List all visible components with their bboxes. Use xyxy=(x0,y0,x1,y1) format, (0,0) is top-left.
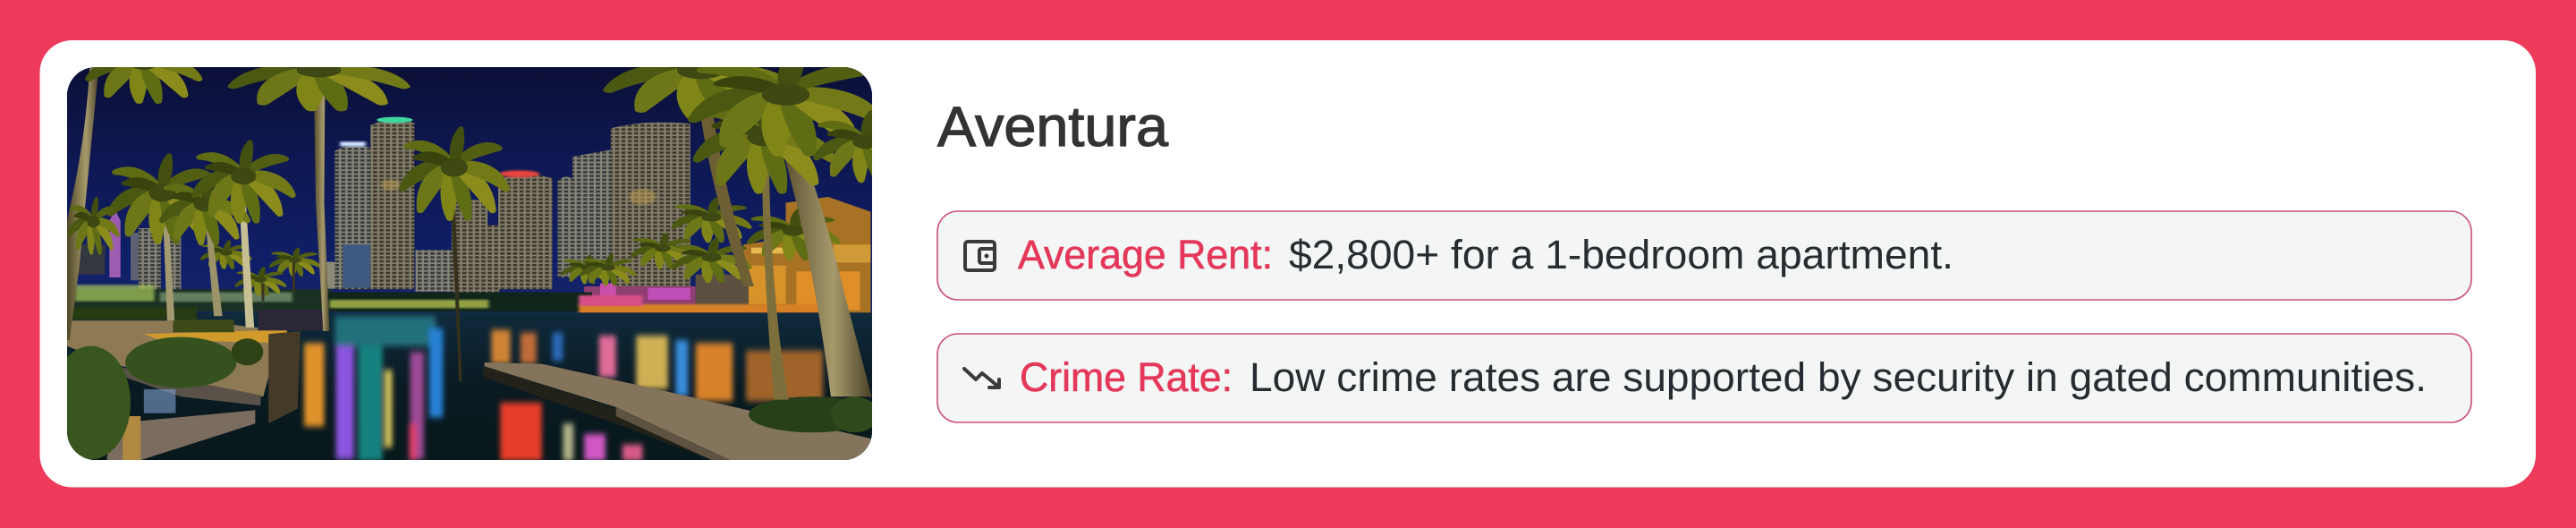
row box xyxy=(937,334,2471,422)
icon: wallet xyxy=(965,242,995,270)
shoreline lights xyxy=(67,285,844,315)
value: crime rate: Low crime rates are supported by security in gated communities. xyxy=(1250,354,2427,400)
right wooden pier xyxy=(483,362,870,460)
info row: crime rate xyxy=(937,334,2471,422)
photo: Aventura waterfront at night xyxy=(67,67,872,460)
central towers xyxy=(326,117,691,294)
far left skyline xyxy=(76,209,181,291)
sky xyxy=(54,63,886,316)
left shore path xyxy=(67,307,324,461)
icon: trending down arrow xyxy=(964,369,999,387)
small mid palms xyxy=(201,199,837,302)
water reflections xyxy=(304,316,823,461)
info row: average rent xyxy=(937,211,2471,300)
heading: Aventura xyxy=(937,96,1169,158)
bushes xyxy=(51,337,878,459)
orange resort buildings right xyxy=(584,197,870,313)
palm crowns xyxy=(67,67,872,255)
water xyxy=(54,312,886,462)
palm trunks xyxy=(67,67,872,400)
value: average rent: $2,800+ for a 1-bedroom apartment. xyxy=(1289,232,1953,277)
row box xyxy=(937,211,2471,300)
label: average rent: Average Rent: xyxy=(1018,232,1273,277)
label: crime rate: Crime Rate: xyxy=(1020,354,1233,400)
